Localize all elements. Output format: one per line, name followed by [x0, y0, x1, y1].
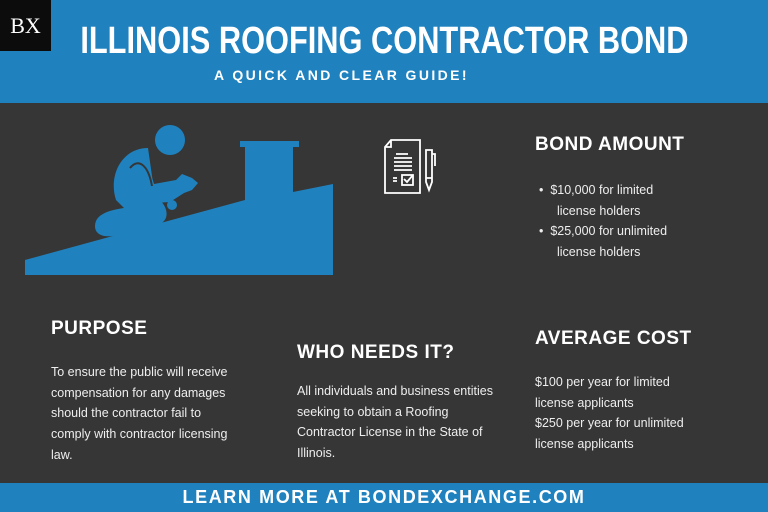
title: ILLINOIS ROOFING CONTRACTOR BOND: [80, 20, 688, 62]
text: purpose: should the contractor fail to: [51, 406, 201, 420]
text: who needs it: Illinois.: [297, 446, 335, 460]
text: purpose: comply with contractor licensing: [51, 427, 227, 441]
text: average cost: $250 per year for unlimited: [535, 416, 684, 430]
bullet list: license holders: [557, 204, 640, 218]
text: purpose: To ensure the public will receive: [51, 365, 227, 379]
text: who needs it: All individuals and business entities: [297, 384, 493, 398]
heading: who needs it: WHO NEEDS IT?: [297, 342, 454, 363]
text: purpose: law.: [51, 448, 73, 462]
text: who needs it: seeking to obtain a Roofing: [297, 405, 448, 419]
section: average cost: [535, 328, 692, 451]
subtitle: A QUICK AND CLEAR GUIDE!: [214, 67, 469, 83]
heading: average cost: AVERAGE COST: [535, 328, 692, 349]
bullet list: • $10,000 for limited: [539, 183, 653, 197]
section: purpose: [51, 318, 227, 462]
text: average cost: license applicants: [535, 396, 634, 410]
heading: bond amount: BOND AMOUNT: [535, 134, 684, 155]
bullet list: • $25,000 for unlimited: [539, 224, 667, 238]
header band: [0, 0, 768, 103]
section: bond amount: [535, 134, 684, 259]
bullet list: [539, 183, 667, 259]
text: purpose: compensation for any damages: [51, 386, 225, 400]
logo: BX: BX: [10, 13, 41, 38]
icon: document with pen: [384, 139, 436, 194]
person: [95, 125, 198, 236]
text: purpose: [51, 365, 227, 462]
illustration: roofer on roof: [25, 125, 333, 275]
text: who needs it: [297, 384, 493, 460]
text: average cost: license applicants: [535, 437, 634, 451]
logo: BX: [0, 0, 51, 51]
heading: purpose: PURPOSE: [51, 318, 147, 339]
section: who needs it: [297, 342, 493, 460]
text: who needs it: Contractor License in the State of: [297, 425, 483, 439]
bullet list: license holders: [557, 245, 640, 259]
footer band: LEARN MORE AT BONDEXCHANGE.COM: [182, 487, 586, 507]
footer band: [0, 483, 768, 512]
text: average cost: [535, 375, 684, 451]
roof with chimney: [25, 141, 333, 275]
text: average cost: $100 per year for limited: [535, 375, 670, 389]
